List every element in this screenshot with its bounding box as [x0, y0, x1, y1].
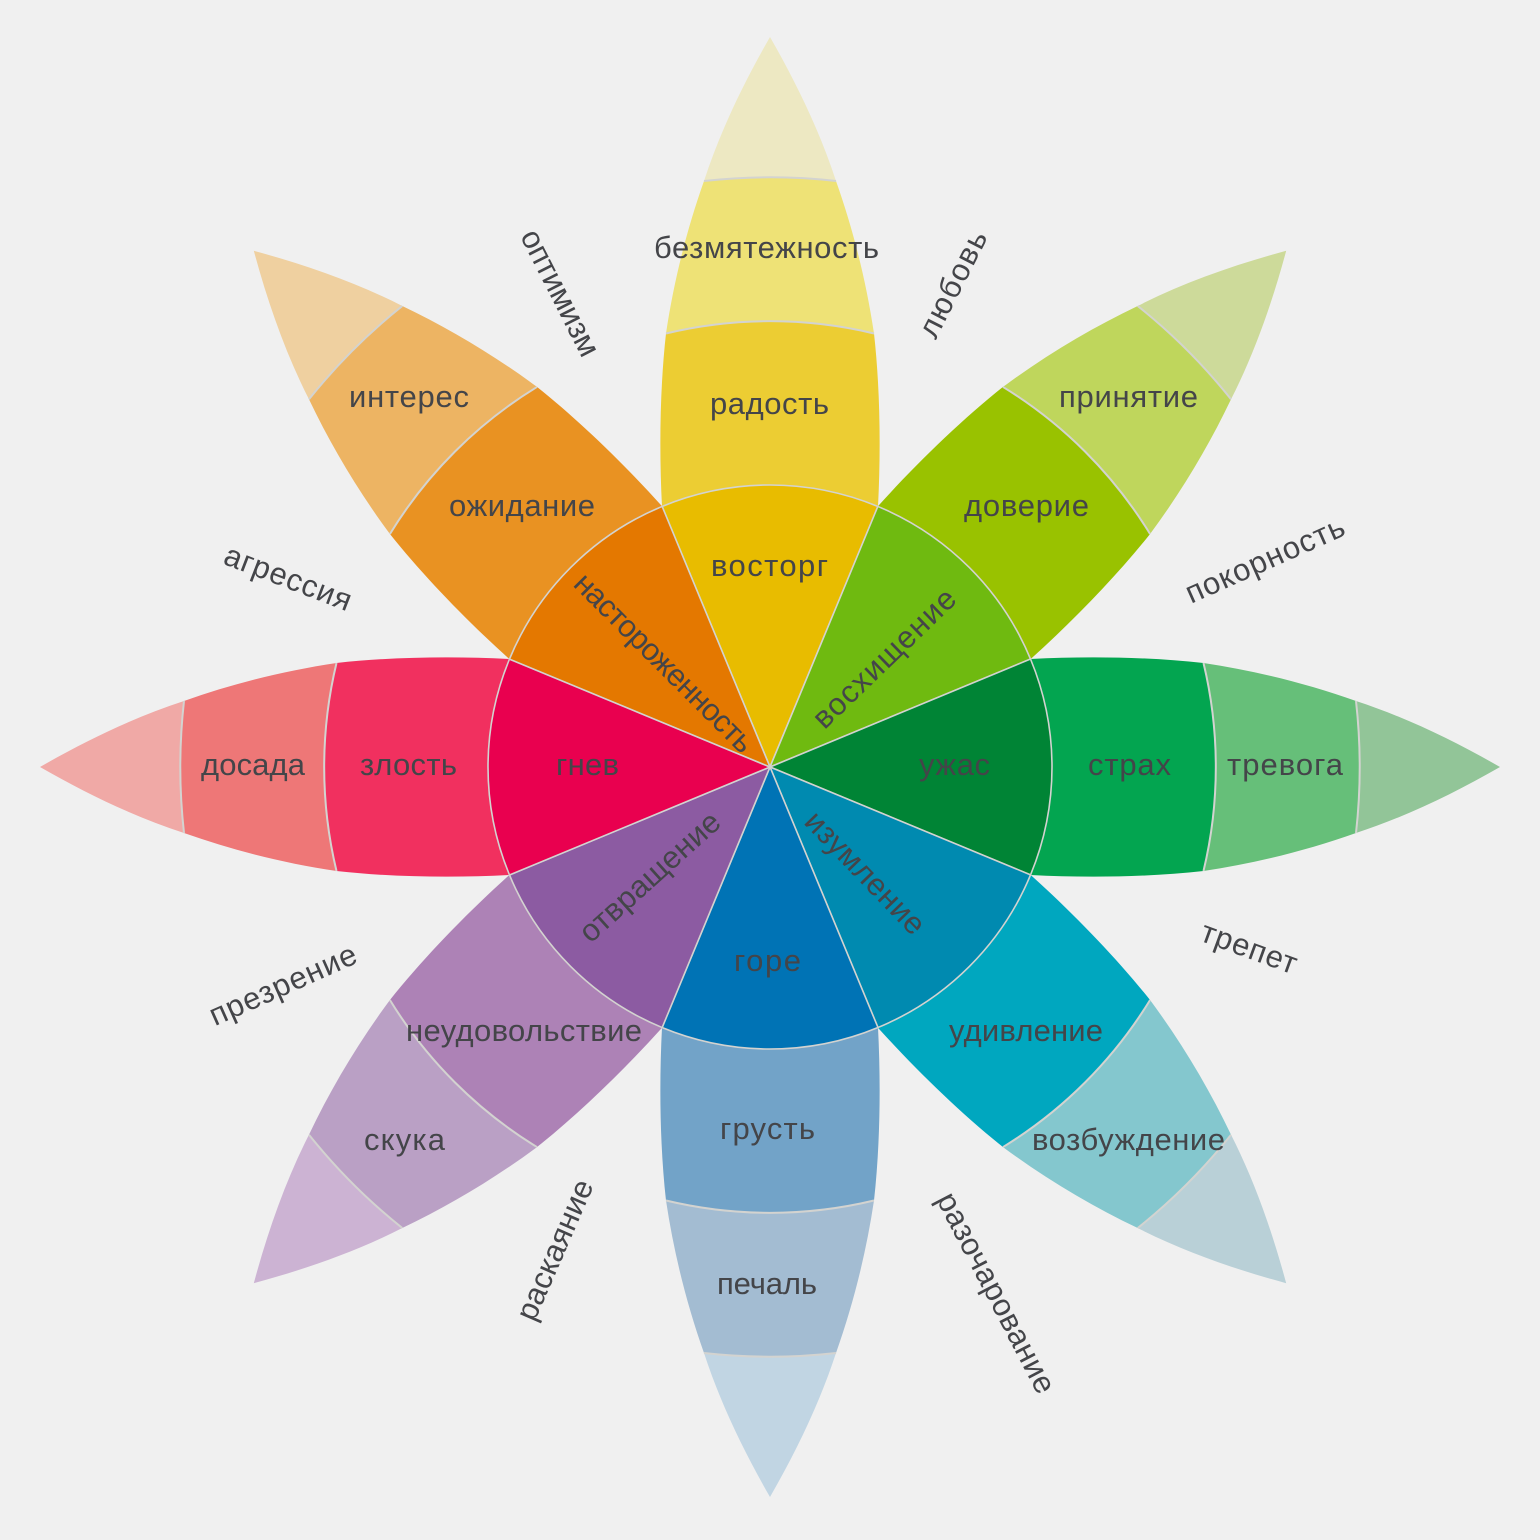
label: disappointment: разочарование	[930, 1186, 1063, 1399]
tier: anticipation	[377, 374, 663, 660]
label: удивление	[949, 1013, 1103, 1048]
label: страх	[1088, 747, 1172, 782]
label: гнев	[556, 747, 619, 782]
tier: interest	[279, 276, 537, 534]
label: восторг	[711, 548, 828, 583]
wedge: ecstasy	[662, 485, 878, 767]
petal: red anger	[40, 657, 510, 877]
label: восхищение	[805, 581, 963, 735]
tier: pale tip	[1356, 701, 1500, 833]
petal: yellow joy	[660, 37, 880, 506]
wedge: vigilance	[494, 491, 846, 843]
label: досада	[201, 747, 306, 782]
central circle of wedges	[488, 485, 1052, 1049]
tier: fear	[1030, 657, 1216, 877]
label: безмятежность	[654, 230, 879, 265]
label: возбуждение	[1032, 1122, 1225, 1157]
label: радость	[710, 386, 829, 421]
tier: pale tip	[1138, 204, 1333, 399]
tier: boredom	[279, 1000, 537, 1258]
wedge: rage	[488, 659, 770, 875]
petal: yellow-green trust	[877, 173, 1364, 660]
label: скука	[364, 1122, 446, 1157]
label: интерес	[349, 379, 469, 414]
petal: teal surprise	[877, 874, 1364, 1361]
tier: pale tip	[704, 37, 836, 181]
label: тревога	[1227, 747, 1344, 782]
dyad labels between petals	[204, 223, 1350, 1399]
tier: annoyance	[180, 663, 336, 871]
petal: blue sadness	[660, 1028, 880, 1497]
label: aggressiveness: агрессия	[219, 537, 357, 618]
tier: surprise	[877, 874, 1163, 1160]
petal: orange anticipation	[176, 173, 663, 660]
petal: green fear	[1030, 657, 1500, 877]
tier: pale tip	[1138, 1135, 1333, 1330]
tier: pale tip	[207, 204, 402, 399]
tier: anger	[324, 657, 510, 877]
label: contempt: презрение	[204, 936, 362, 1033]
wedge: amazement	[694, 691, 1046, 1043]
tier: joy	[660, 321, 880, 506]
label: awe: трепет	[1196, 914, 1302, 981]
tier: pale tip	[207, 1135, 402, 1330]
tier: trust	[877, 374, 1163, 660]
label: неудовольствие	[406, 1013, 642, 1048]
tier: pale tip	[704, 1353, 836, 1497]
label: submission: покорность	[1180, 509, 1350, 610]
tier: sorrow	[666, 1200, 874, 1357]
label: принятие	[1059, 379, 1198, 414]
label: изумление	[798, 804, 933, 942]
tier: acceptance	[1003, 276, 1261, 534]
wedge: disgust	[494, 691, 846, 1043]
label: ожидание	[449, 488, 595, 523]
tier: anxiety	[1204, 663, 1360, 871]
label: love: любовь	[911, 224, 994, 343]
label: отвращение	[572, 804, 728, 949]
petal: purple displeasure	[176, 874, 663, 1361]
label: remorse: раскаяние	[509, 1174, 600, 1326]
label: грусть	[720, 1111, 815, 1146]
tier: displeasure	[377, 874, 663, 1160]
label: настороженность	[567, 565, 762, 760]
label: злость	[360, 747, 457, 782]
wedge: admiration	[694, 491, 1046, 843]
emotion labels inside petals	[201, 230, 1344, 1301]
tier: pale tip	[40, 701, 184, 833]
label: горе	[734, 943, 801, 978]
label: ужас	[919, 747, 990, 782]
label: доверие	[964, 488, 1089, 523]
label: optimism: оптимизм	[514, 223, 607, 362]
tier: sadness	[660, 1028, 880, 1213]
tier: serenity	[666, 177, 874, 334]
label: печаль	[717, 1266, 817, 1301]
wedge: terror	[770, 659, 1052, 875]
tier: excitement	[1003, 1000, 1261, 1258]
wedge: grief	[662, 767, 878, 1049]
